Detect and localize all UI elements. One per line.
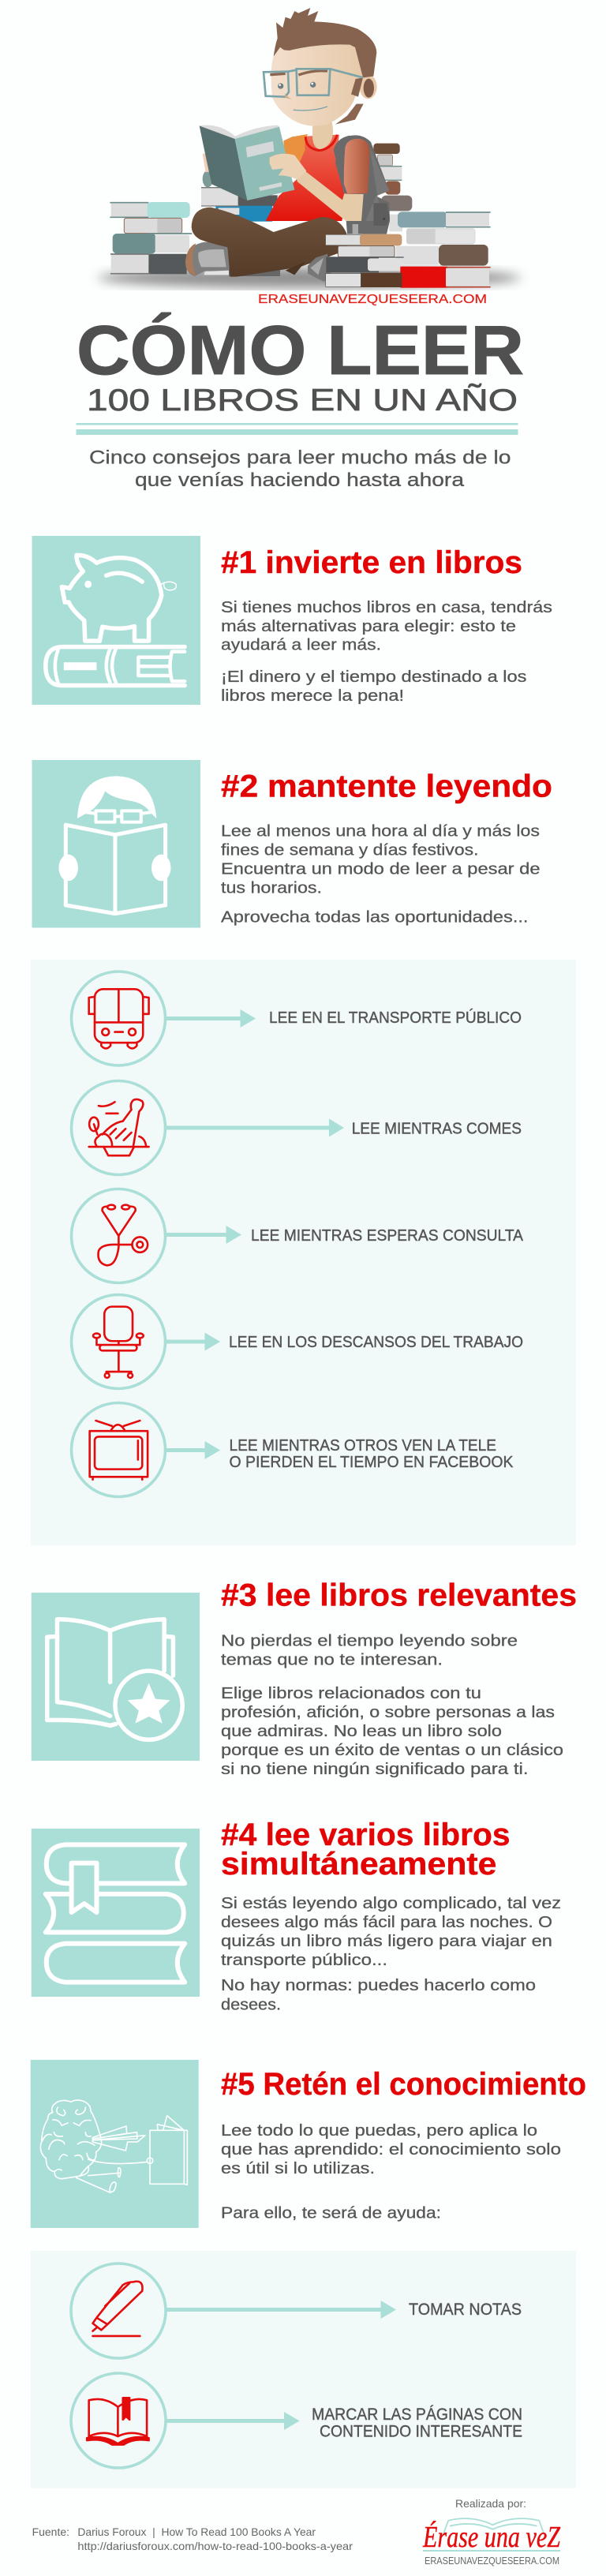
item: work breaks: LEE EN LOS DESCANSOS DEL TRABAJO — [229, 1334, 523, 1351]
logo: Érase una vez: Érase una veZ — [422, 2521, 561, 2554]
item: mark pages — [71, 2373, 522, 2468]
item: while eating — [71, 1081, 522, 1174]
body text — [221, 1632, 563, 1778]
illustration: boy reading among stacks of books — [98, 8, 521, 288]
body text — [221, 1894, 561, 2013]
heading: #4 lee varios libros — [221, 1818, 510, 1852]
body text — [221, 822, 540, 927]
logo: Érase una vez: ERASEUNAVEZQUESEERA.COM — [425, 2555, 559, 2567]
icon: person reading — [32, 760, 200, 928]
body text: Aprovecha todas las oportunidades... — [221, 908, 529, 927]
panel: reading opportunities — [31, 960, 576, 1545]
body text: más alternativas para elegir: esto te — [221, 617, 516, 635]
icon: stack of books with bookmark — [32, 1829, 200, 1997]
source credits: Darius Foroux | How To Read 100 Books A Year — [77, 2525, 316, 2538]
body text — [221, 598, 552, 705]
body text — [221, 2121, 561, 2222]
item: doctor's waiting room: LEE MIENTRAS ESPERAS CONSULTA — [251, 1227, 524, 1245]
section 5: retain knowledge — [31, 2060, 586, 2228]
section 2: keep reading — [32, 760, 552, 928]
body text: Elige libros relacionados con tu — [221, 1684, 481, 1702]
body text: Lee todo lo que puedas, pero aplica lo — [221, 2121, 537, 2140]
body text: tus horarios. — [221, 879, 322, 897]
heading: simultáneamente — [221, 1847, 496, 1881]
source credits: Fuente: — [32, 2525, 69, 2538]
body text: libros merece la pena! — [221, 687, 404, 705]
heading: #2 mantente leyendo — [221, 769, 552, 803]
subtitle: Cinco consejos para leer mucho más de lo — [89, 447, 511, 469]
heading — [221, 1818, 510, 1881]
body text: Si tienes muchos libros en casa, tendrás — [221, 598, 552, 616]
item: mark pages: CONTENIDO INTERESANTE — [320, 2423, 522, 2440]
body text: ayudará a leer más. — [221, 636, 381, 653]
title: 100 LIBROS EN UN AÑO — [87, 384, 518, 417]
item: public transport — [71, 972, 522, 1065]
item: public transport: LEE EN EL TRANSPORTE PÚBLICO — [269, 1009, 522, 1027]
body text: profesión, afición, o sobre personas a las — [221, 1703, 555, 1721]
icon: open book with star — [32, 1593, 200, 1761]
body text: Para ello, te será de ayuda: — [221, 2203, 441, 2222]
body text: No pierdas el tiempo leyendo sobre — [221, 1632, 518, 1650]
body text: es útil si lo utilizas. — [221, 2159, 375, 2177]
body text: desees algo más fácil para las noches. O — [221, 1913, 552, 1931]
panel: retention aids — [31, 2251, 576, 2488]
section 1: invest in books — [32, 536, 552, 705]
item: while eating: LEE MIENTRAS COMES — [352, 1121, 522, 1138]
body text: transporte público... — [221, 1951, 387, 1969]
body text: Encuentra un modo de leer a pesar de — [221, 860, 540, 878]
item: while others watch TV: LEE MIENTRAS OTROS VEN LA TELE — [229, 1437, 496, 1455]
subtitle: que venías haciendo hasta ahora — [135, 470, 465, 491]
source credits: http://dariusforoux.com/how-to-read-100-books-a-year — [77, 2540, 353, 2552]
item: work breaks — [71, 1294, 523, 1389]
item: doctor's waiting room — [71, 1189, 524, 1283]
logo: Érase una vez — [422, 2497, 561, 2567]
heading: #5 Retén el conocimiento — [221, 2067, 586, 2102]
heading: #3 lee libros relevantes — [221, 1578, 577, 1613]
body text: que has aprendido: el conocimiento solo — [221, 2140, 561, 2159]
body text: porque es un éxito de ventas o un clásico — [221, 1741, 563, 1759]
item: mark pages: MARCAR LAS PÁGINAS CON — [312, 2406, 522, 2424]
body text: Si estás leyendo algo complicado, tal vez — [221, 1894, 561, 1912]
item: take notes: TOMAR NOTAS — [409, 2301, 522, 2319]
body text: ¡El dinero y el tiempo destinado a los — [221, 668, 527, 686]
body text: desees. — [221, 1995, 281, 2013]
body text: No hay normas: puedes hacerlo como — [221, 1976, 536, 1994]
title: CÓMO LEER — [77, 311, 524, 389]
body text: fines de semana y días festivos. — [221, 841, 478, 859]
item: while others watch TV: O PIERDEN EL TIEMPO EN FACEBOOK — [229, 1454, 514, 1471]
title — [77, 311, 524, 417]
subtitle — [89, 447, 511, 491]
source credits — [32, 2525, 353, 2552]
section 4: several books at once — [32, 1818, 561, 2013]
section 3: relevant books — [32, 1578, 577, 1778]
logo: Érase una vez: Realizada por: — [455, 2497, 526, 2510]
body text: que admiras. No leas un libro solo — [221, 1722, 502, 1740]
icon: brain, paper planes and book — [31, 2060, 199, 2228]
item: while others watch TV — [71, 1403, 514, 1496]
body text: si no tiene ningún significado para ti. — [221, 1760, 529, 1778]
website credit: ERASEUNAVEZQUESEERA.COM — [258, 293, 487, 306]
body text: Lee al menos una hora al día y más los — [221, 822, 540, 840]
body text: temas que no te interesan. — [221, 1651, 443, 1669]
body text: quizás un libro más ligero para viajar en — [221, 1932, 552, 1950]
heading: #1 invierte en libros — [221, 545, 522, 580]
icon: piggy bank on a book — [32, 536, 200, 705]
item: take notes — [71, 2263, 522, 2358]
